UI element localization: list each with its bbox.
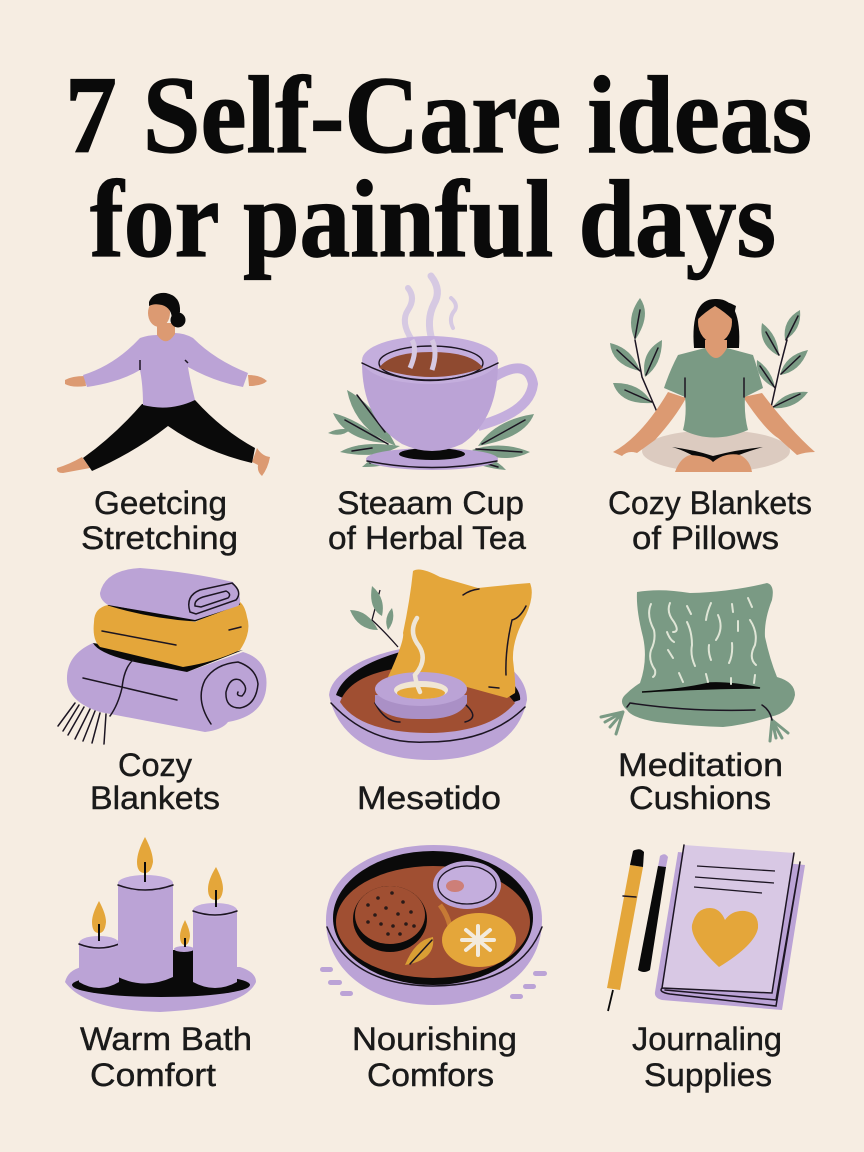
label: pillows bbox=[608, 485, 812, 556]
icon: journal and pens bbox=[607, 845, 805, 1011]
label: tea: of Herbal Tea bbox=[328, 520, 526, 556]
label: journaling: Journaling bbox=[632, 1021, 782, 1057]
label: journaling bbox=[632, 1021, 782, 1093]
label: nourishing: Comfors bbox=[367, 1057, 494, 1093]
icon: food bowl bbox=[320, 845, 547, 1005]
label: tea bbox=[328, 485, 526, 556]
label: cushions bbox=[618, 747, 783, 816]
label: cushions: Cushions bbox=[629, 780, 771, 816]
icon: candles bbox=[65, 837, 256, 1012]
label: warm bath bbox=[80, 1021, 252, 1093]
label: journaling: Supplies bbox=[644, 1057, 772, 1093]
label: mesatido: Mesətido bbox=[357, 780, 501, 816]
label: warm bath: Comfort bbox=[90, 1057, 216, 1093]
label: cushions: Meditation bbox=[618, 747, 783, 783]
icon: stacked blankets bbox=[58, 568, 267, 744]
icon: woman stretching bbox=[57, 293, 270, 476]
label: nourishing: Nourishing bbox=[352, 1021, 517, 1057]
title bbox=[65, 54, 812, 280]
label: warm bath: Warm Bath bbox=[80, 1021, 252, 1057]
label: stretching: Stretching bbox=[81, 520, 238, 556]
icon: bowl with pillow bbox=[329, 569, 532, 760]
label: pillows: Cozy Blankets bbox=[608, 485, 812, 521]
label: nourishing bbox=[352, 1021, 517, 1093]
label: blankets bbox=[90, 747, 220, 816]
title: 7 Self-Care ideas bbox=[65, 54, 812, 176]
label: stretching: Geetcing bbox=[94, 485, 227, 521]
icon: meditation cushion bbox=[601, 583, 795, 741]
label: blankets: Cozy bbox=[118, 747, 192, 783]
label: tea: Steaam Cup bbox=[337, 485, 524, 521]
label: blankets: Blankets bbox=[90, 780, 220, 816]
icon: meditating woman bbox=[610, 298, 815, 472]
label: pillows: of Pillows bbox=[632, 520, 779, 556]
title: for painful days bbox=[90, 158, 776, 280]
label: stretching bbox=[81, 485, 238, 556]
icon: herbal tea cup bbox=[328, 276, 534, 470]
